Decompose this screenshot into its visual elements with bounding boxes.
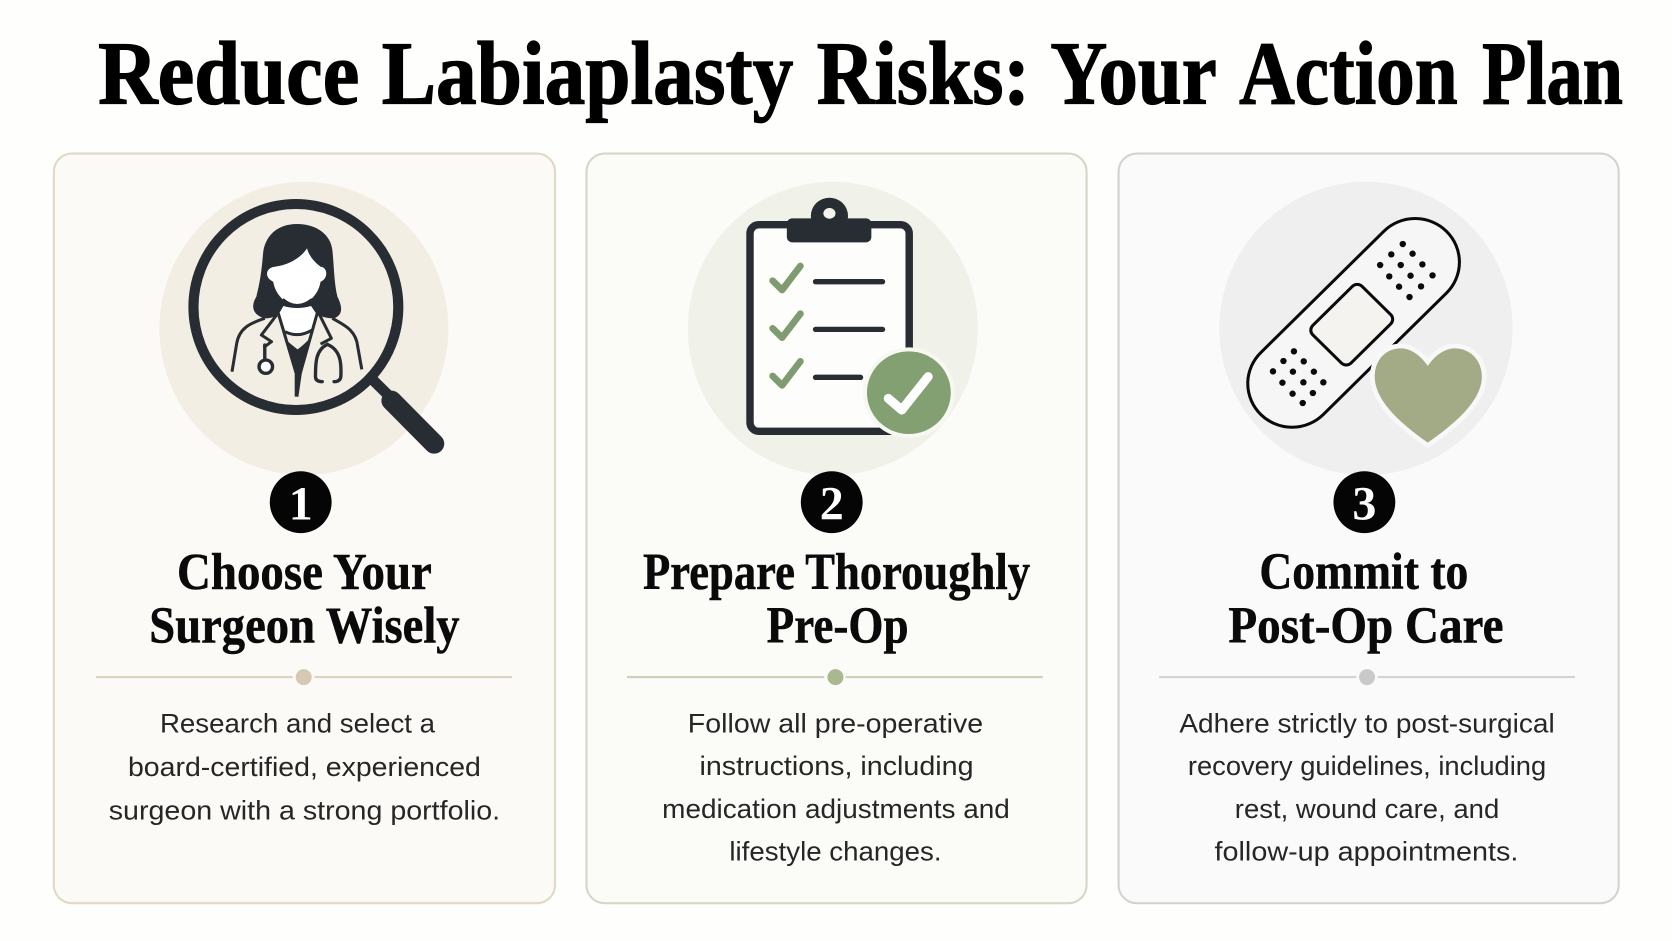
heading: Post-Op Care xyxy=(1228,596,1504,654)
body text: Follow all pre-operative xyxy=(688,708,983,739)
stethoscope xyxy=(265,344,341,382)
check badge xyxy=(863,347,955,438)
title: Your xyxy=(1050,24,1217,123)
number badge 3 xyxy=(1333,471,1395,533)
bandage xyxy=(1229,200,1478,445)
heading: Choose Your xyxy=(177,543,432,601)
body text: follow-up appointments. xyxy=(1215,835,1518,866)
card background xyxy=(586,154,1087,903)
bandage dots xyxy=(1270,241,1436,406)
title: Action xyxy=(1239,24,1458,123)
clipboard board xyxy=(750,225,909,431)
body text: recovery guidelines, including xyxy=(1188,750,1546,781)
heart xyxy=(1375,348,1482,443)
shirt xyxy=(286,338,310,380)
body text: medication adjustments and xyxy=(662,793,1010,824)
body text: lifestyle changes. xyxy=(729,835,942,866)
doctor figure xyxy=(232,224,362,397)
gauze pad xyxy=(1308,282,1395,368)
heading: Pre-Op xyxy=(767,596,909,654)
heading: Surgeon Wisely xyxy=(149,596,460,654)
heading xyxy=(643,543,1030,654)
clip xyxy=(787,198,871,242)
title: Risks: xyxy=(817,24,1030,123)
icon: magnifier over doctor xyxy=(193,204,434,444)
icon: bandage with heart xyxy=(1229,200,1482,445)
hair xyxy=(253,224,341,318)
body text: board-certified, experienced xyxy=(128,751,481,782)
number badge 2 xyxy=(801,471,863,533)
icon backdrop circle xyxy=(159,182,448,475)
card background xyxy=(54,154,555,903)
icon: clipboard with checklist xyxy=(750,198,955,438)
icon backdrop circle xyxy=(1219,182,1513,475)
title: Reduce xyxy=(98,24,359,123)
heading: Commit to xyxy=(1259,543,1468,601)
icon backdrop circle xyxy=(688,182,978,475)
body text: Research and select a xyxy=(160,708,436,739)
coat lines xyxy=(232,313,362,397)
face outline xyxy=(283,299,312,306)
magnifier handle xyxy=(373,380,434,444)
checklist lines xyxy=(816,282,883,377)
title xyxy=(98,24,1623,123)
body text xyxy=(1179,708,1555,866)
title: Labiaplasty xyxy=(382,24,793,123)
heading xyxy=(149,543,460,654)
body text: rest, wound care, and xyxy=(1235,793,1499,824)
heading xyxy=(1228,543,1504,654)
number badge 2: 2 xyxy=(820,477,844,530)
panel: choose your surgeon xyxy=(54,154,555,903)
body text xyxy=(662,708,1010,866)
body text: Adhere strictly to post-surgical xyxy=(1179,708,1555,739)
magnifier ring xyxy=(193,204,398,410)
face and neck xyxy=(267,248,326,335)
body text xyxy=(109,708,500,825)
body text: surgeon with a strong portfolio. xyxy=(109,794,500,825)
number badge 3: 3 xyxy=(1352,477,1376,530)
number badge 1: 1 xyxy=(289,477,313,530)
title: Plan xyxy=(1482,24,1623,123)
heading: Prepare Thoroughly xyxy=(643,543,1030,601)
number badge 1 xyxy=(270,471,332,533)
card background xyxy=(1119,154,1619,903)
check marks xyxy=(773,266,800,385)
panel: prepare thoroughly xyxy=(586,154,1087,903)
body text: instructions, including xyxy=(700,750,974,781)
panel: commit to post-op care xyxy=(1119,154,1619,903)
